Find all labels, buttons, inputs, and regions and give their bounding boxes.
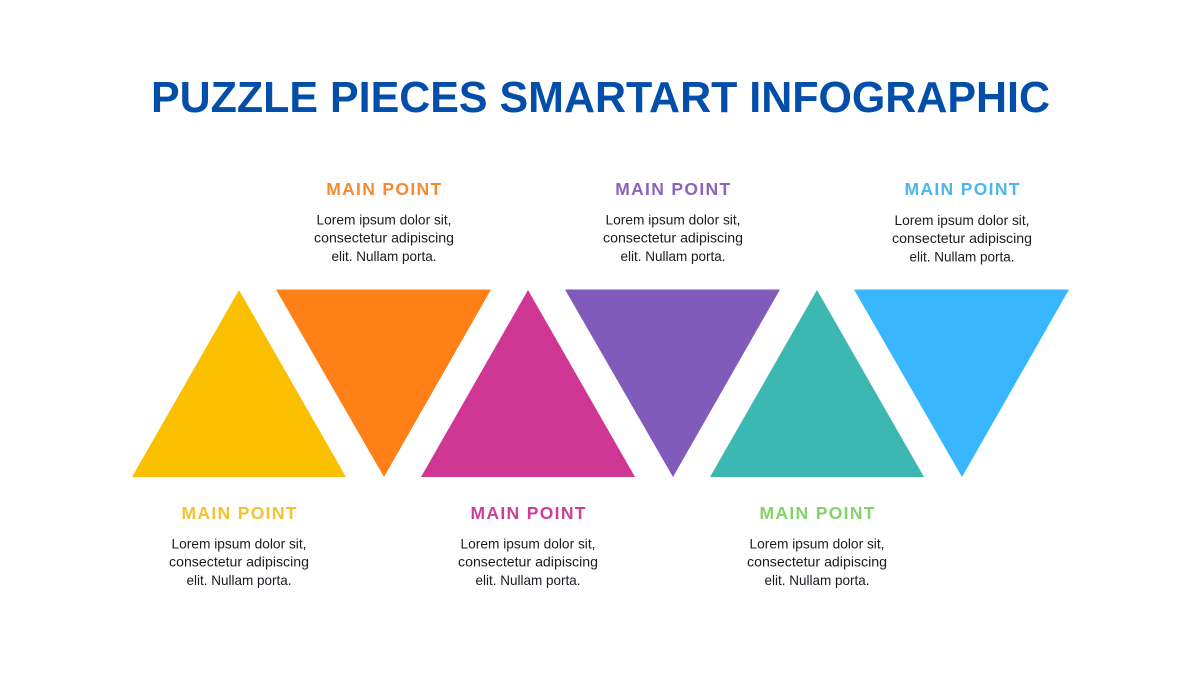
- text block: orange main point: [314, 179, 454, 264]
- heading: MAIN POINT: [326, 179, 441, 199]
- body text: Lorem ipsum dolor sit,: [750, 536, 884, 552]
- body text: [603, 212, 743, 264]
- text block: green main point: [747, 503, 887, 588]
- body text: Lorem ipsum dolor sit,: [606, 212, 740, 228]
- body text: elit. Nullam porta.: [764, 573, 870, 588]
- body text: [892, 213, 1032, 264]
- body text: elit. Nullam porta.: [186, 573, 292, 588]
- text block: magenta main point: [458, 503, 598, 588]
- body text: elit. Nullam porta.: [620, 249, 726, 264]
- text block: blue main point: [892, 179, 1032, 264]
- body text: elit. Nullam porta.: [910, 250, 1014, 264]
- body text: Lorem ipsum dolor sit,: [316, 212, 452, 228]
- body text: [314, 212, 454, 264]
- heading: MAIN POINT: [760, 503, 875, 523]
- body text: Lorem ipsum dolor sit,: [460, 536, 596, 552]
- body text: elit. Nullam porta.: [476, 573, 580, 588]
- body text: Lorem ipsum dolor sit,: [172, 536, 306, 552]
- body text: consectetur adipiscing: [314, 230, 454, 246]
- heading: MAIN POINT: [470, 503, 586, 523]
- body text: consectetur adipiscing: [892, 231, 1032, 246]
- body text: consectetur adipiscing: [458, 554, 598, 570]
- triangle: magenta: [421, 290, 635, 477]
- triangle diagram: [132, 290, 1069, 477]
- body text: Lorem ipsum dolor sit,: [894, 213, 1030, 228]
- triangle: blue: [854, 290, 1069, 477]
- body text: [458, 536, 598, 588]
- triangle: yellow: [132, 290, 346, 477]
- title: PUZZLE PIECES SMARTART INFOGRAPHIC: [151, 74, 1050, 122]
- body text: consectetur adipiscing: [169, 554, 309, 570]
- heading: MAIN POINT: [904, 179, 1020, 199]
- body text: [747, 536, 887, 588]
- heading: MAIN POINT: [615, 179, 730, 199]
- text block: yellow main point: [169, 503, 309, 588]
- body text: consectetur adipiscing: [747, 554, 887, 570]
- body text: consectetur adipiscing: [603, 230, 743, 246]
- text block: purple main point: [603, 179, 743, 264]
- body text: elit. Nullam porta.: [332, 249, 436, 264]
- body text: [169, 536, 309, 588]
- triangle: purple: [565, 290, 780, 477]
- heading: MAIN POINT: [182, 503, 297, 523]
- triangle: teal: [710, 290, 924, 477]
- triangle: orange: [276, 290, 491, 477]
